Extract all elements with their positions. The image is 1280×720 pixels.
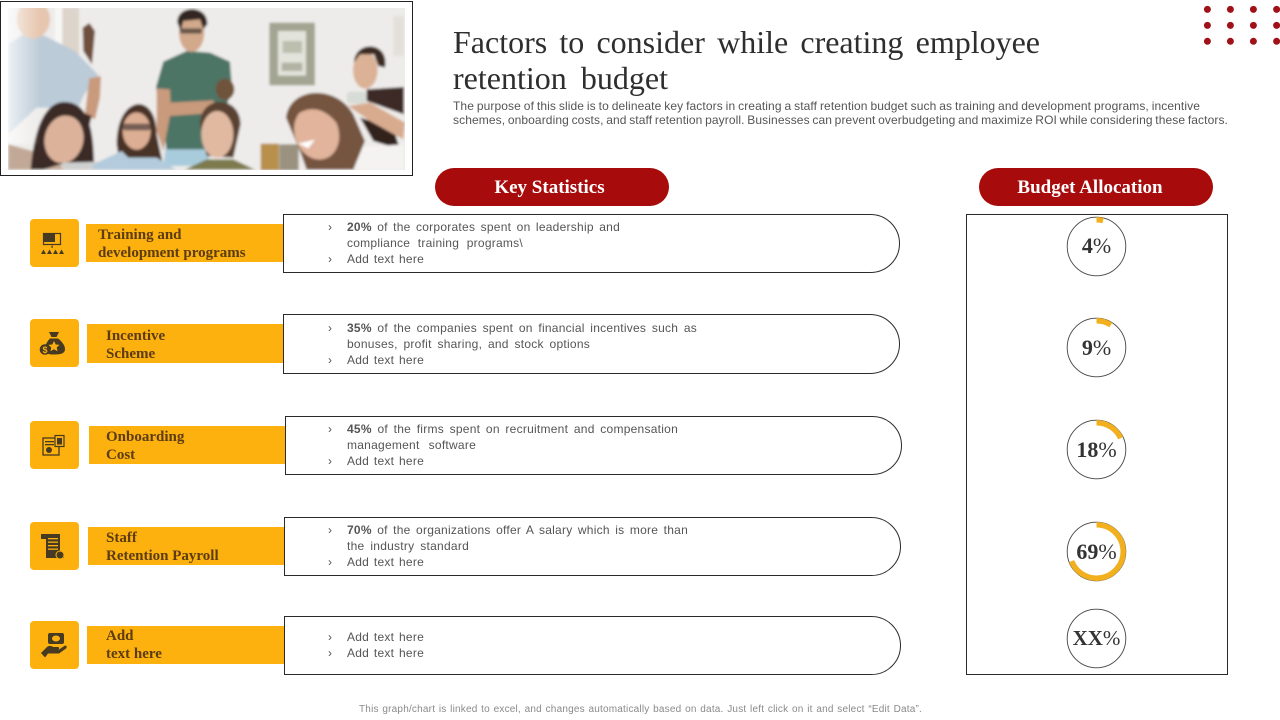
- icon: presentation to audience: [30, 219, 79, 267]
- statistics pill: payroll: the industry standard: [347, 539, 469, 553]
- label: incentive scheme: [87, 324, 283, 363]
- label: training and development programs: development programs: [98, 245, 246, 261]
- panel: budget allocation donuts: [966, 214, 1228, 675]
- label: training and development programs: [86, 224, 283, 262]
- label: incentive scheme: Scheme: [106, 346, 155, 362]
- statistics pill: add text: ›: [328, 630, 332, 644]
- label: incentive scheme: Incentive: [106, 328, 165, 344]
- row: staff retention payroll: [30, 517, 901, 576]
- statistics pill: add text: Add text here: [347, 646, 424, 660]
- donut: 4%: [1067, 217, 1126, 276]
- icon: money bag: [30, 319, 79, 367]
- title: [453, 24, 1040, 96]
- decorative dot grid: [1204, 6, 1280, 45]
- statistics pill: training: ›: [328, 220, 332, 234]
- label: staff retention payroll: Retention Payroll: [106, 548, 219, 564]
- label: onboarding cost: [89, 426, 285, 464]
- statistics pill: incentive: [283, 314, 900, 374]
- statistics pill: payroll: ›: [328, 555, 332, 569]
- row: onboarding cost: [30, 416, 902, 475]
- heading: key statistics: [435, 168, 669, 206]
- picture frame: [269, 23, 315, 85]
- description text: schemes, onboarding costs, and staff retention payroll. Businesses can prevent overbudgeting and maximize ROI while considering these factors.: [453, 113, 1228, 127]
- statistics pill: onboarding: [285, 416, 902, 475]
- statistics pill: training: 20% of the corporates spent on leadership and: [347, 220, 620, 234]
- label: onboarding cost: Onboarding: [106, 429, 184, 445]
- donut: 18%: [1067, 420, 1126, 479]
- photo: team gathered around a laptop: [0, 1, 413, 176]
- statistics pill: add text: Add text here: [347, 630, 424, 644]
- donut: XX%: XX%: [1073, 626, 1120, 650]
- front-middle woman: [117, 104, 163, 166]
- donut: XX%: [1067, 609, 1126, 668]
- statistics pill: onboarding: ›: [328, 422, 332, 436]
- icon: payroll document: [30, 522, 79, 570]
- centre man: [163, 144, 209, 166]
- faded left side: [8, 8, 38, 144]
- donut: 9%: [1067, 318, 1126, 377]
- statistics pill: training: Add text here: [347, 252, 424, 266]
- label: onboarding cost: Cost: [106, 447, 135, 463]
- statistics pill: payroll: Add text here: [347, 555, 424, 569]
- heading: budget allocation: [979, 168, 1213, 206]
- statistics pill: onboarding: Add text here: [347, 454, 424, 468]
- donut: 69%: 69%: [1076, 539, 1117, 564]
- icon: hand holding money: [30, 621, 79, 669]
- label: staff retention payroll: Staff: [106, 530, 137, 546]
- icon: money bag: $: [42, 345, 48, 355]
- label: add text here: Add: [106, 628, 134, 644]
- heading: budget allocation: Budget Allocation: [1017, 177, 1163, 198]
- statistics pill: add text: [284, 616, 901, 675]
- statistics pill: training: compliance training programs\: [347, 236, 523, 250]
- row: add text here: [30, 616, 901, 675]
- description text: The purpose of this slide is to delineate key factors in creating a staff retention budget such as training and development programs, incentive: [453, 99, 1200, 113]
- donut: 9%: 9%: [1082, 335, 1111, 360]
- title: Factors to consider while creating employee: [453, 24, 1040, 60]
- statistics pill: onboarding: management software: [347, 438, 476, 452]
- label: training and development programs: Training and: [98, 227, 182, 243]
- statistics pill: training: ›: [328, 252, 332, 266]
- statistics pill: incentive: Add text here: [347, 353, 424, 367]
- donut: 69%: [1067, 522, 1126, 581]
- statistics pill: incentive: ›: [328, 321, 332, 335]
- bun woman: [216, 79, 234, 100]
- title: retention budget: [453, 60, 668, 96]
- statistics pill: add text: ›: [328, 646, 332, 660]
- row: incentive scheme: [30, 314, 900, 374]
- back-left man: [8, 34, 98, 134]
- footer note: This graph/chart is linked to excel, and changes automatically based on data. Just left click on it and select “Edit Data”.: [359, 704, 922, 715]
- donut: 4%: 4%: [1082, 233, 1111, 258]
- label: staff retention payroll: [88, 527, 284, 565]
- statistics pill: payroll: [284, 517, 901, 576]
- statistics pill: training: [283, 214, 900, 273]
- statistics pill: onboarding: 45% of the firms spent on recruitment and compensation: [347, 422, 678, 436]
- statistics pill: payroll: 70% of the organizations offer A salary which is more than: [347, 523, 688, 537]
- icon: calculator and bill: [30, 421, 79, 469]
- description text: [453, 99, 1228, 127]
- donut: 18%: 18%: [1076, 437, 1117, 462]
- front-right woman: [386, 142, 402, 152]
- back-right woman: [367, 87, 404, 114]
- statistics pill: incentive: ›: [328, 353, 332, 367]
- boxes on shelf: [261, 144, 279, 170]
- label: add text here: text here: [106, 646, 162, 662]
- row: training and development programs: [30, 214, 900, 273]
- heading: key statistics: Key Statistics: [494, 177, 605, 198]
- front-left woman: [8, 144, 63, 170]
- statistics pill: incentive: bonuses, profit sharing, and stock options: [347, 337, 590, 351]
- label: add text here: [87, 626, 284, 664]
- statistics pill: onboarding: ›: [328, 454, 332, 468]
- statistics pill: incentive: 35% of the companies spent on financial incentives such as: [347, 321, 697, 335]
- statistics pill: payroll: ›: [328, 523, 332, 537]
